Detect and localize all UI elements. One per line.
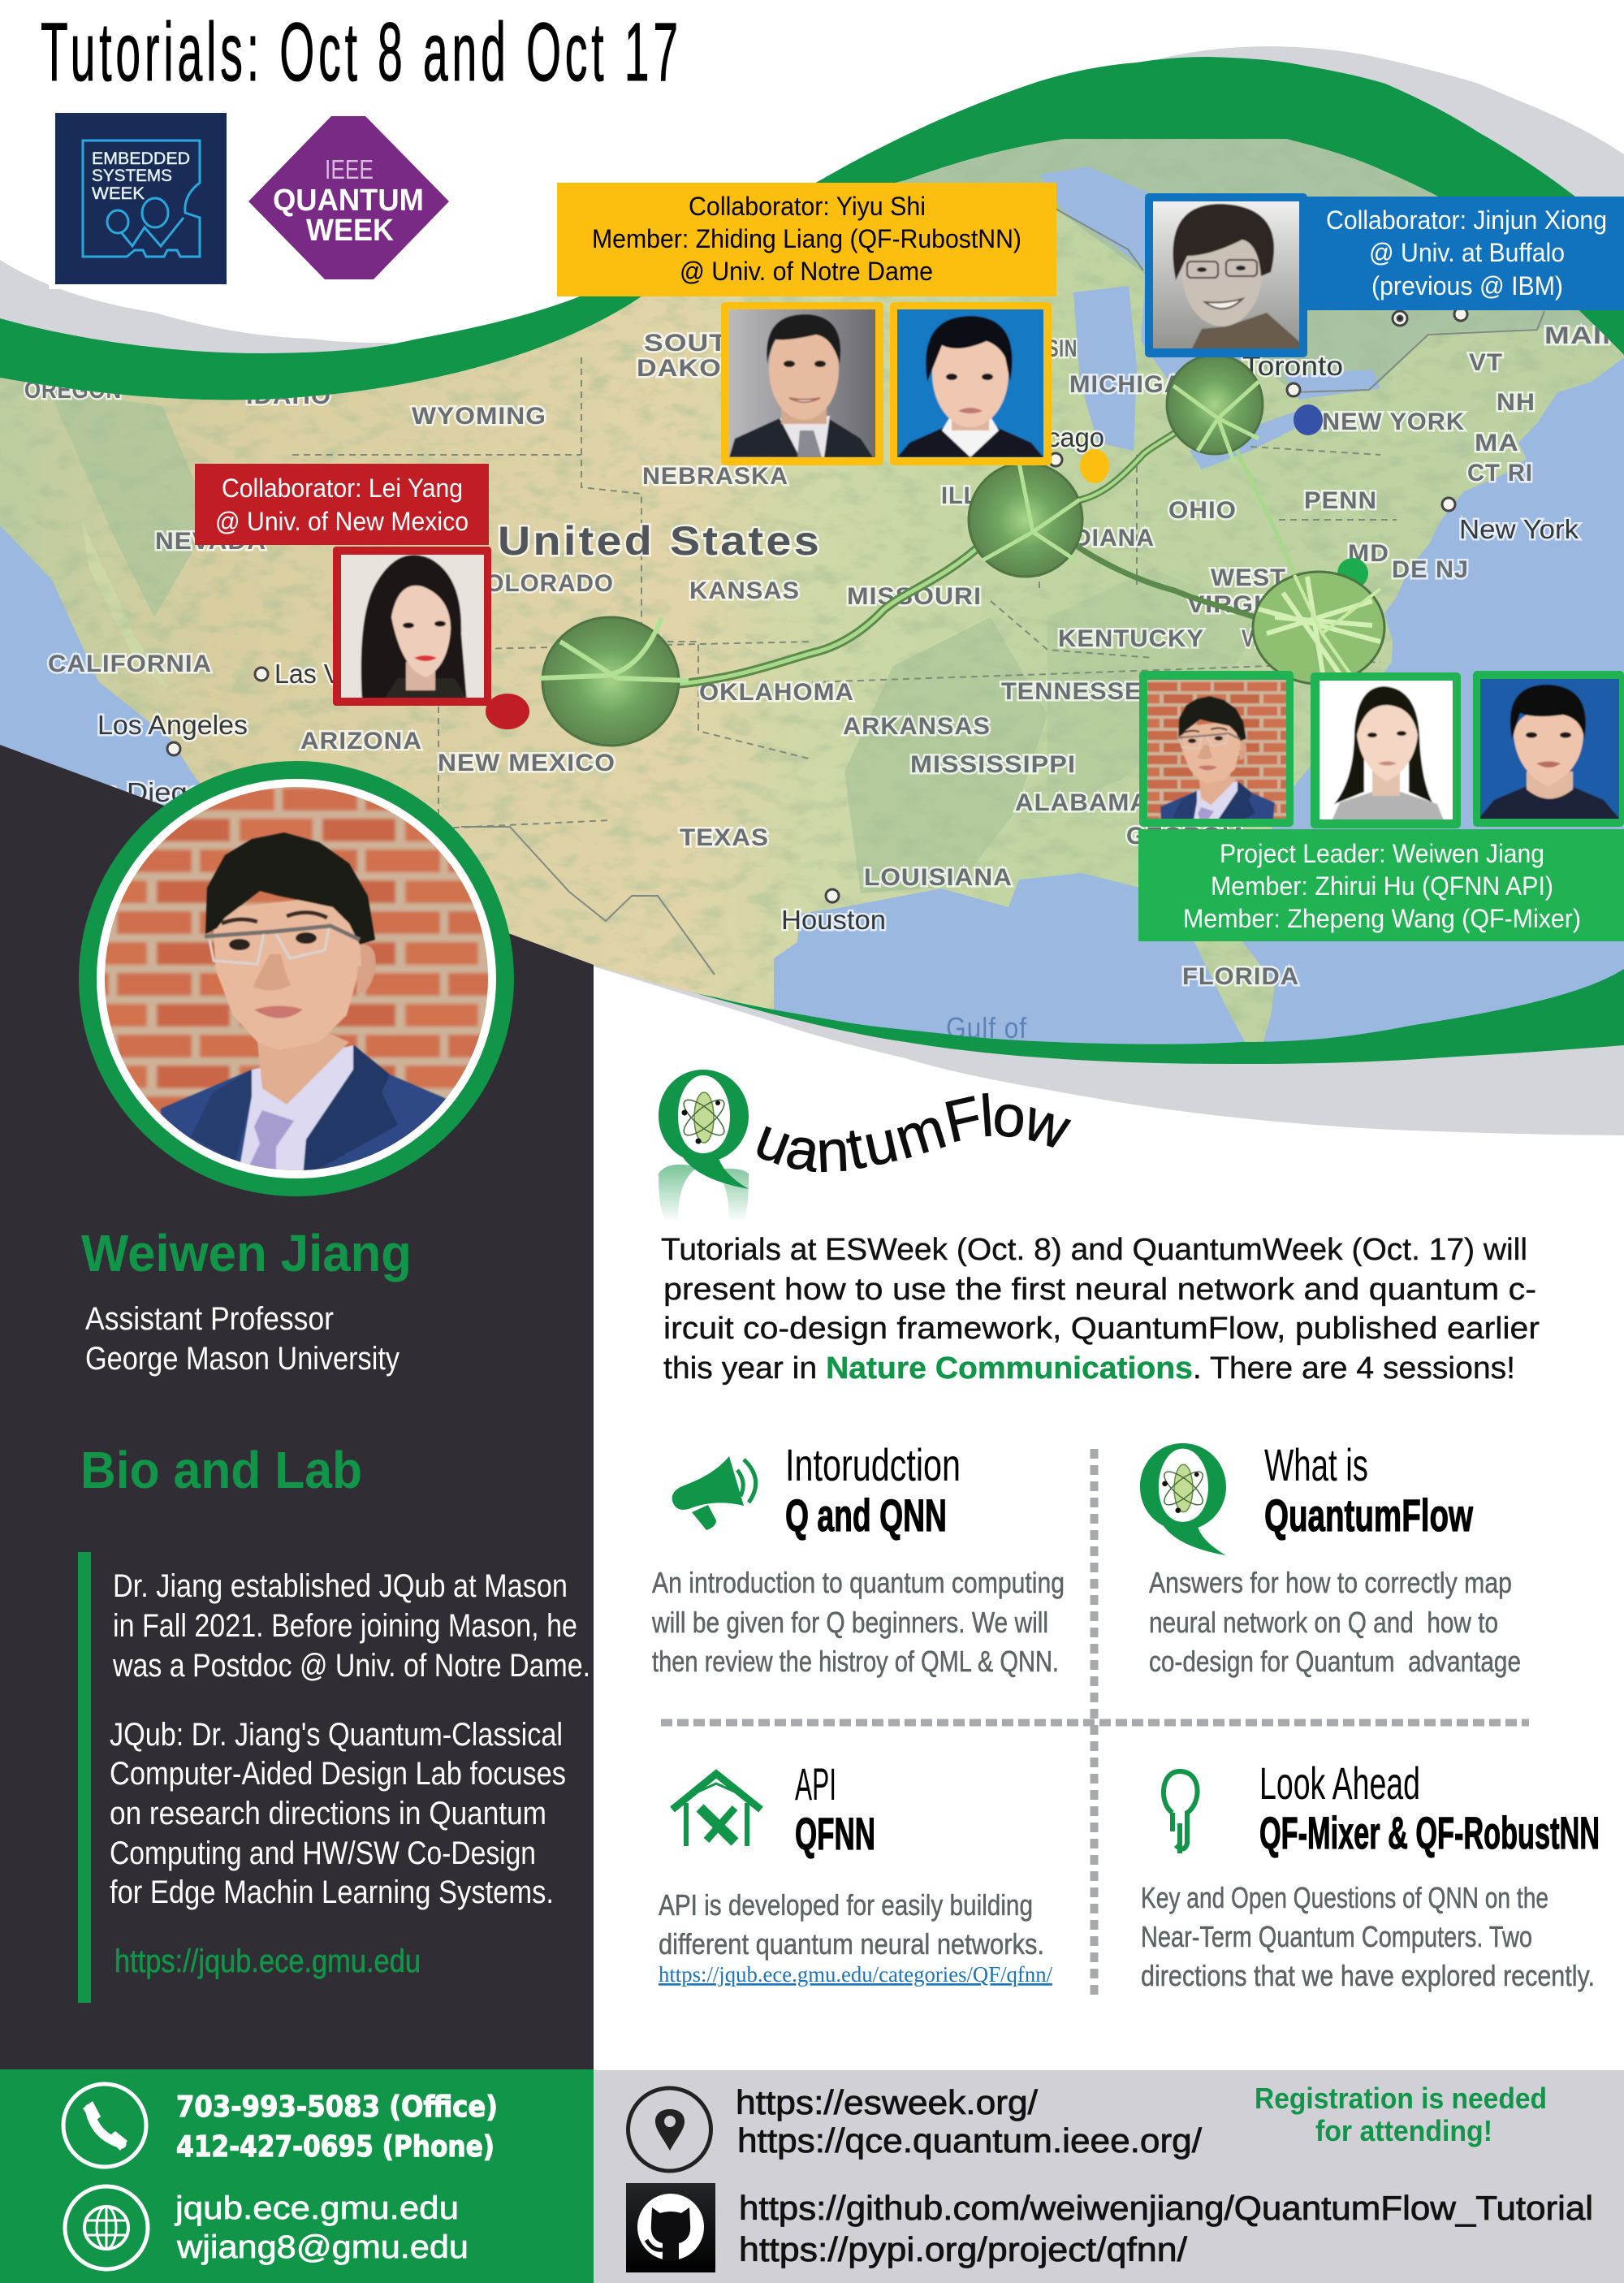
map labels: TEXAS xyxy=(680,824,769,851)
map labels: NEBRASKA xyxy=(642,463,788,490)
map labels: INDIANA xyxy=(1047,525,1155,551)
borders xyxy=(461,209,1544,975)
accent bar xyxy=(78,1552,91,2003)
icon: Q atom xyxy=(1140,1443,1226,1555)
leaf node 3 xyxy=(1167,355,1263,463)
logo: Embedded Systems Week: WEEK xyxy=(92,184,145,203)
icon: github xyxy=(626,2183,715,2272)
text: role: George Mason University xyxy=(85,1341,400,1377)
photo: Weiwen Jiang small xyxy=(1139,671,1294,837)
panel: green contact footer xyxy=(0,2069,594,2283)
text: co-design for Quantum advantage xyxy=(1149,1645,1521,1678)
text: lab description: Computer-Aided Design Lab focuses xyxy=(110,1756,566,1792)
text: introduction: this year in Nature Communications . There are 4 sessions! xyxy=(663,1351,1515,1386)
map labels: MA xyxy=(1475,430,1519,456)
map labels: NH xyxy=(1497,389,1535,416)
logo: QuantumFlow: uantumFlow xyxy=(757,1093,1072,1173)
text: neural network on Q and how to xyxy=(1149,1606,1498,1639)
text: web and email: jqub.ece.gmu.edu xyxy=(175,2190,459,2226)
photo: Weiwen Jiang portrait xyxy=(79,761,514,1196)
panel: red collaborator label: Collaborator: Lei Yang xyxy=(222,473,463,503)
text: then review the histroy of QML & QNN. xyxy=(652,1645,1059,1678)
text: role: Assistant Professor xyxy=(85,1301,334,1337)
text: code links: https://pypi.org/project/qfnn/ xyxy=(739,2230,1187,2268)
panel: dark profile background xyxy=(0,745,594,2069)
map labels: ILLINOIS xyxy=(941,482,1047,509)
text: bio: Dr. Jiang established JQub at Mason xyxy=(113,1568,568,1604)
map labels: ALABAMA xyxy=(1015,789,1149,816)
panel: green team label: Project Leader: Weiwen Jiang xyxy=(1220,839,1544,868)
map labels: COLORADO xyxy=(467,570,614,597)
text: conference links xyxy=(736,2083,1202,2160)
map labels: VIRGINIA xyxy=(1187,591,1309,618)
text: will be given for Q beginners. We will xyxy=(651,1606,1048,1639)
photo: Jinjun Xiong xyxy=(1145,193,1307,357)
session: API xyxy=(659,1758,1052,1987)
heading: bio and lab: Bio and Lab xyxy=(80,1441,362,1499)
map labels: DAKOTA xyxy=(637,355,758,382)
map labels: GEORGIA xyxy=(1126,823,1248,850)
text: Answers for how to correctly map xyxy=(1149,1566,1512,1599)
heading: API xyxy=(795,1758,836,1810)
map labels: DE NJ xyxy=(1392,556,1469,583)
lower green swoosh xyxy=(636,934,1624,1064)
icon: phone xyxy=(63,2084,146,2167)
panel: yellow collaborator label: Member: Zhiding Liang (QF-RubostNN) xyxy=(592,224,1021,253)
map labels: SOUTH xyxy=(644,330,749,357)
panel: yellow collaborator label xyxy=(557,183,1056,296)
text: lab description: on research directions in Quantum xyxy=(110,1796,546,1831)
map labels: ARIZONA xyxy=(300,728,422,755)
panel: green team label xyxy=(1138,829,1624,941)
city labels: Chicago xyxy=(1007,422,1104,452)
photo: Lei Yang xyxy=(333,547,491,706)
divider vertical xyxy=(1090,1449,1098,1996)
map labels: WYOMING xyxy=(412,403,546,430)
marker: green dot xyxy=(1337,558,1368,589)
city labels: Las Vegas xyxy=(274,659,396,689)
heading: name: Weiwen Jiang xyxy=(81,1224,412,1282)
text xyxy=(1141,1881,1595,1992)
city labels: Toronto xyxy=(1242,351,1343,381)
text: lab description: Computing and HW/SW Co-Design xyxy=(110,1835,536,1871)
leaf node 4 xyxy=(1253,572,1384,684)
icon: location pin xyxy=(628,2088,711,2171)
map labels: PENN xyxy=(1304,487,1377,514)
text: introduction xyxy=(661,1233,1540,1386)
city labels: Los Angeles xyxy=(97,710,248,740)
text: role xyxy=(85,1301,400,1377)
text: web and email: wjiang8@gmu.edu xyxy=(176,2229,469,2265)
text: An introduction to quantum computing xyxy=(652,1566,1065,1599)
logo: QuantumFlow xyxy=(658,1070,1072,1218)
logo: Embedded Systems Week: SYSTEMS xyxy=(92,166,172,185)
map of the United States xyxy=(0,122,1624,1056)
panel: red collaborator label xyxy=(195,464,489,545)
photo: Zhirui Hu xyxy=(1311,672,1461,828)
map labels: ARKANSAS xyxy=(843,713,991,740)
icon: light bulb xyxy=(1164,1771,1198,1853)
text: Near-Term Quantum Computers. Two xyxy=(1141,1920,1532,1953)
text: phone numbers xyxy=(176,2091,498,2164)
map labels: LOUISIANA xyxy=(864,864,1013,891)
photo: Zhepeng Wang xyxy=(1473,671,1624,827)
text: lab description xyxy=(110,1717,566,1910)
panel: red collaborator label: @ Univ. of New Mexico xyxy=(215,507,469,536)
panel: blue collaborator label: @ Univ. at Buffalo xyxy=(1369,238,1565,267)
heading: What is xyxy=(1264,1439,1368,1490)
map labels: MD xyxy=(1348,540,1389,567)
session: what is QuantumFlow xyxy=(1140,1439,1521,1678)
logo: IEEE Quantum Week xyxy=(248,116,449,279)
divider horizontal xyxy=(661,1719,1529,1727)
map labels: IDAHO xyxy=(246,383,331,409)
text: bio: in Fall 2021. Before joining Mason, he xyxy=(113,1608,577,1644)
session: introduction xyxy=(651,1439,1065,1678)
map labels: OHIO xyxy=(1168,497,1237,524)
text: different quantum neural networks. xyxy=(659,1927,1044,1961)
panel: blue collaborator label xyxy=(1307,197,1624,310)
callout: registration: Registration is needed xyxy=(1255,2082,1547,2115)
map labels: NEW MEXICO xyxy=(438,750,615,776)
heading bold: Q and QNN xyxy=(785,1490,947,1541)
city labels: Houston xyxy=(781,905,886,935)
marker: blue dot xyxy=(1294,404,1323,435)
top green swoosh xyxy=(0,57,1624,422)
text: conference links: https://qce.quantum.ieee.org/ xyxy=(737,2121,1202,2160)
text: lab url: https://jqub.ece.gmu.edu xyxy=(114,1944,421,1979)
heading: Intorudction xyxy=(785,1439,961,1490)
text: phone numbers: 703-993-5083 (Office) xyxy=(176,2091,498,2124)
text: code links xyxy=(739,2189,1593,2268)
panel: blue collaborator label: (previous @ IBM) xyxy=(1371,271,1563,301)
map labels: CALIFORNIA xyxy=(48,651,212,677)
map labels: FLORIDA xyxy=(1182,963,1299,990)
logo: Embedded Systems Week xyxy=(49,110,231,289)
great lakes xyxy=(1039,166,1380,469)
top gray swoosh xyxy=(0,46,1624,422)
leaf node 1 xyxy=(539,617,689,746)
map labels: OKLAHOMA xyxy=(699,679,854,706)
marker: red dot xyxy=(486,694,529,729)
text: API is developed for easily building xyxy=(659,1888,1033,1922)
marker: yellow dot xyxy=(1080,449,1109,483)
text: introduction: Tutorials at ESWeek (Oct. 8) and QuantumWeek (Oct. 17) will xyxy=(661,1233,1527,1267)
map labels: WEST xyxy=(1211,564,1286,591)
city labels: New York xyxy=(1459,514,1579,544)
icon: house with tools xyxy=(672,1774,761,1846)
title: Tutorials: Oct 8 and Oct 17 xyxy=(41,6,682,98)
panel: gray links footer xyxy=(594,2070,1624,2283)
map labels xyxy=(24,322,1624,1044)
city labels: San Diego xyxy=(66,777,204,807)
text: web and email xyxy=(175,2190,469,2265)
city markers xyxy=(167,308,1467,902)
text: code links: https://github.com/weiwenjiang/QuantumFlow_Tutorial xyxy=(739,2189,1593,2227)
map labels: MICHIGAN xyxy=(1069,371,1202,398)
city labels xyxy=(66,351,1579,935)
panel: blue collaborator label: Collaborator: Jinjun Xiong xyxy=(1326,205,1607,235)
text: lab description: JQub: Dr. Jiang's Quantum-Classical xyxy=(110,1717,563,1753)
heading bold: QuantumFlow xyxy=(1264,1490,1473,1541)
map labels: WISCONSIN xyxy=(972,335,1078,362)
map labels: TENNESSEE xyxy=(1001,678,1160,705)
map labels: MISSOURI xyxy=(847,583,982,610)
heading: Look Ahead xyxy=(1259,1758,1420,1809)
panel: green team label: Member: Zhirui Hu (QFNN API) xyxy=(1211,871,1553,901)
text: introduction: ircuit co-design framework, QuantumFlow, published earlier xyxy=(663,1312,1540,1346)
network stems between leaves xyxy=(650,422,1299,686)
logo: IEEE Quantum Week: IEEE xyxy=(325,154,374,184)
map labels: KENTUCKY xyxy=(1058,625,1204,652)
map labels: VIRGINIA xyxy=(1242,625,1331,652)
text xyxy=(1149,1566,1521,1678)
leaf node 2 xyxy=(969,463,1082,577)
text: introduction: present how to use the first neural network and quantum c- xyxy=(663,1273,1536,1307)
callout: registration xyxy=(1255,2082,1547,2147)
logo: IEEE Quantum Week: QUANTUM xyxy=(273,184,424,218)
map labels: NEVADA xyxy=(155,528,266,555)
panel: yellow collaborator label: Collaborator: Yiyu Shi xyxy=(689,192,926,221)
lower gray swoosh xyxy=(594,934,1624,1135)
text xyxy=(651,1566,1065,1678)
panel: yellow collaborator label: @ Univ. of Notre Dame xyxy=(680,257,933,286)
session: look ahead xyxy=(1141,1758,1600,1992)
text: bio: was a Postdoc @ Univ. of Notre Dame. xyxy=(112,1648,590,1684)
photo: Zhiding Liang xyxy=(890,302,1052,465)
text: conference links: https://esweek.org/ xyxy=(736,2083,1038,2121)
text: lab description: for Edge Machin Learning Systems. xyxy=(110,1874,554,1910)
map labels: OREGON xyxy=(24,377,122,404)
logo: IEEE Quantum Week: WEEK xyxy=(306,214,395,248)
text: bio xyxy=(112,1568,590,1684)
map labels: United States xyxy=(498,518,822,564)
map labels: MISSISSIPPI xyxy=(910,751,1076,778)
icon: megaphone xyxy=(672,1456,756,1530)
text: phone numbers: 412-427-0695 (Phone) xyxy=(176,2130,495,2164)
map labels: VT xyxy=(1469,349,1503,376)
logo: Embedded Systems Week: EMBEDDED xyxy=(92,149,190,168)
link: https://jqub.ece.gmu.edu/categories/QF/qfnn/ xyxy=(659,1962,1052,1987)
map labels: CT RI xyxy=(1467,460,1533,486)
icon: globe xyxy=(65,2186,148,2269)
map labels: NEW YORK xyxy=(1322,409,1465,435)
map labels: Gulf of xyxy=(946,1011,1027,1044)
panel: green team label: Member: Zhepeng Wang (QF-Mixer) xyxy=(1183,904,1581,933)
text xyxy=(659,1888,1044,1961)
photo: Yiyu Shi xyxy=(721,302,883,465)
heading bold: QFNN xyxy=(795,1808,875,1859)
callout: registration: for attending! xyxy=(1315,2114,1492,2147)
map labels: KANSAS xyxy=(689,577,800,604)
